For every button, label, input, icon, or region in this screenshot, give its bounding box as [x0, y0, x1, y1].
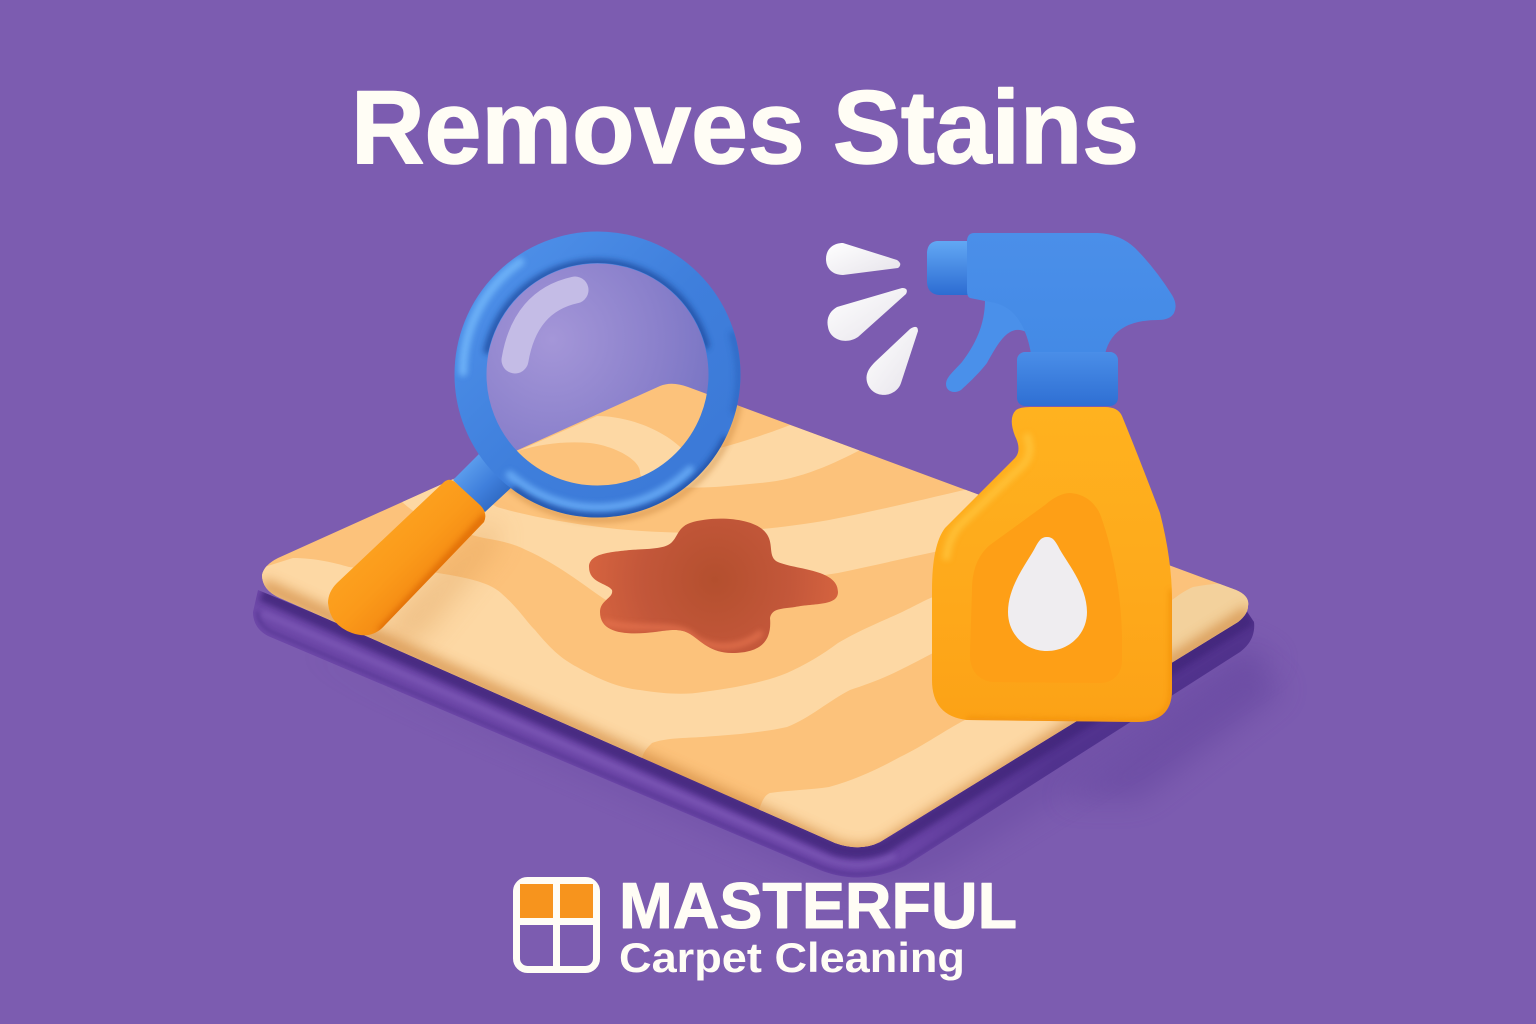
lens highlight: [515, 290, 575, 360]
magnifier lens glass: [484, 260, 712, 488]
carpet: [262, 384, 1248, 848]
bottle drop icon: [1008, 537, 1087, 651]
ring shadow: [508, 405, 743, 525]
stain: [589, 519, 838, 653]
droplet 1: [826, 243, 900, 275]
logo tagline: Carpet Cleaning: [619, 934, 965, 981]
title: Removes Stains: [351, 70, 1139, 186]
carpet light band lower: [262, 558, 932, 758]
handle shadow: [382, 522, 502, 645]
droplet 3: [866, 327, 918, 395]
trigger: [946, 300, 1026, 392]
collar: [1017, 352, 1118, 406]
magnifier shaft: [453, 452, 513, 512]
spray droplets: [826, 243, 918, 395]
droplet 2: [827, 288, 907, 341]
carpet light band corner: [759, 720, 1076, 848]
magnifier ring: [463, 248, 739, 517]
logo icon: [516, 880, 596, 970]
background shadows: [300, 640, 1285, 887]
carpet lower edge shading: [262, 585, 1250, 851]
bottle label: [970, 493, 1122, 683]
logo: [516, 869, 1017, 981]
magnifier handle: [328, 480, 486, 635]
carpet light band upper: [518, 416, 860, 488]
bottle body: [932, 407, 1172, 722]
carpet light band middle: [400, 478, 1000, 600]
nozzle: [927, 241, 975, 295]
carpet light band right: [1172, 584, 1248, 662]
logo name: MASTERFUL: [619, 869, 1017, 942]
sprayer head: [967, 233, 1176, 354]
magnifying glass: [328, 248, 739, 635]
spray bottle: [927, 233, 1176, 722]
carpet platform base: [253, 590, 1254, 878]
